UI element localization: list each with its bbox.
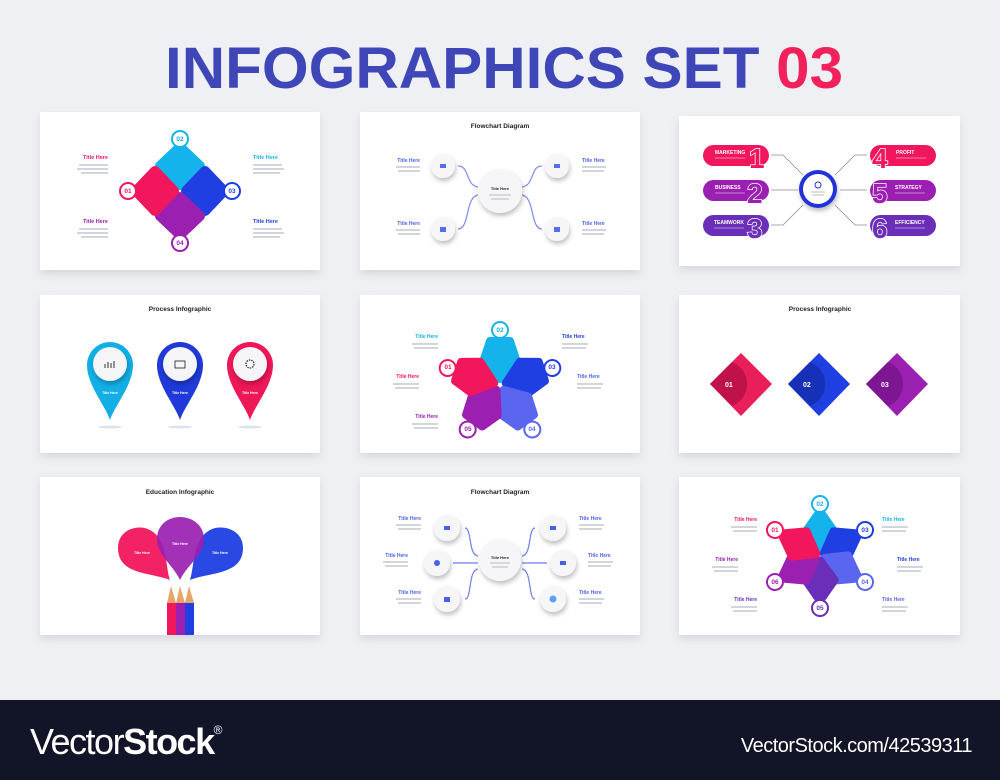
panel: hexagon flower: 06 xyxy=(771,579,779,586)
panel: flowchart 4: Title Here xyxy=(582,221,605,227)
panel: numbered pills: STRATEGY xyxy=(895,185,923,191)
panel: flowchart 6: Title Here xyxy=(579,516,602,522)
panel: flowchart 6: Title Here xyxy=(579,590,602,596)
panel: flowchart 6 xyxy=(360,477,640,635)
pin cyan: Title Here xyxy=(102,391,118,395)
small circles xyxy=(431,154,569,241)
panel: numbered pills xyxy=(679,116,960,266)
diamond 01 xyxy=(710,353,772,416)
panel: pentagon: Title Here xyxy=(562,334,585,340)
central circle xyxy=(479,539,521,581)
diamond 03 xyxy=(866,353,928,416)
panel: flowchart 4 xyxy=(360,112,640,270)
diamond 01: 01 xyxy=(725,382,733,389)
balloon pink xyxy=(118,527,170,580)
panel: pentagon: 02 xyxy=(496,327,504,334)
pin pink xyxy=(227,342,273,420)
petal cyan xyxy=(160,131,200,185)
panel: numbered pills: 5 xyxy=(872,178,888,209)
central circle: Title Here xyxy=(491,186,510,191)
panel: hexagon flower: Title Here xyxy=(734,517,757,523)
numbers: 04 xyxy=(176,240,184,247)
panel: hexagon flower: Title Here xyxy=(715,557,738,563)
panel: hexagon flower: Title Here xyxy=(882,597,905,603)
panel: pentagon xyxy=(360,295,640,453)
right pills xyxy=(870,145,936,236)
panel: hexagon flower: 05 xyxy=(816,605,824,612)
panel: hexagon flower xyxy=(679,477,960,635)
numbers: 02 xyxy=(176,136,184,143)
diamond 03: 03 xyxy=(881,382,889,389)
balloon blue xyxy=(190,527,243,580)
numbers: 01 xyxy=(124,188,132,195)
panel: diamonds: Process Infographic xyxy=(789,306,852,313)
panel: pentagon: Title Here xyxy=(396,374,419,380)
panel: numbered pills: TEAMWORK xyxy=(714,220,744,226)
text blocks: Title Here xyxy=(253,155,278,161)
petal pink xyxy=(120,171,174,211)
panel: numbered pills: 3 xyxy=(747,213,763,244)
panel: education: Education Infographic xyxy=(146,489,215,496)
panel: process pins: Process Infographic xyxy=(149,306,212,313)
panel: pentagon: 01 xyxy=(444,364,452,371)
pin blue xyxy=(157,342,203,420)
panel: hexagon flower: 04 xyxy=(861,579,869,586)
panel: numbered pills: BUSINESS xyxy=(715,185,741,191)
panel: flowchart 6: Title Here xyxy=(385,553,408,559)
pin blue: Title Here xyxy=(172,391,188,395)
petal purple xyxy=(160,197,200,251)
text blocks: Title Here xyxy=(83,219,108,225)
diamond 02 xyxy=(788,353,850,416)
text blocks: Title Here xyxy=(253,219,278,225)
footer bar: VectorStock xyxy=(30,721,214,762)
footer bar xyxy=(0,700,1000,780)
text blocks: Title Here xyxy=(83,155,108,161)
panel: numbered pills: PROFIT xyxy=(896,150,914,156)
panel: numbered pills: 4 xyxy=(872,143,888,174)
panel: numbered pills: MARKETING xyxy=(715,150,745,156)
panel: numbered pills: EFFICIENCY xyxy=(895,220,925,226)
panel: hexagon flower: Title Here xyxy=(882,517,905,523)
pencils xyxy=(167,586,194,635)
panel: flowchart 6: Flowchart Diagram xyxy=(471,489,529,496)
panel: hexagon flower: 01 xyxy=(771,527,779,534)
diamond 02: 02 xyxy=(803,382,811,389)
panel: numbered pills: 6 xyxy=(872,213,888,244)
numbers: 03 xyxy=(228,188,236,195)
central circle xyxy=(478,169,522,213)
panel: education: Title Here xyxy=(172,542,188,546)
footer bar: VectorStock.com/42539311 xyxy=(741,735,972,757)
panel: flowchart 4: Title Here xyxy=(397,158,420,164)
panel: education: Title Here xyxy=(212,551,228,555)
text blocks xyxy=(83,155,278,225)
panel: pentagon: Title Here xyxy=(415,414,438,420)
panel: flowchart 4: Title Here xyxy=(582,158,605,164)
footer bar: ® xyxy=(214,723,223,737)
numbers xyxy=(124,136,236,247)
panel: pentagon: Title Here xyxy=(415,334,438,340)
panel: pentagon: Title Here xyxy=(577,374,600,380)
central circle: Title Here xyxy=(491,555,510,560)
panel: flowchart 6: Title Here xyxy=(398,590,421,596)
panel: pentagon: 03 xyxy=(548,364,556,371)
balloon purple xyxy=(157,517,204,580)
panel: education: Title Here xyxy=(134,551,150,555)
central circle xyxy=(799,170,837,208)
panel: process pins xyxy=(40,295,320,453)
panel: education xyxy=(40,477,320,635)
title: INFOGRAPHICS SET 03 xyxy=(165,36,843,101)
panel: hexagon flower: 02 xyxy=(816,501,824,508)
petal blue xyxy=(186,171,240,211)
panel: pentagon: 05 xyxy=(464,426,472,433)
pin pink: Title Here xyxy=(242,391,258,395)
panel: flowchart 4: Title Here xyxy=(397,221,420,227)
panel: hexagon flower: Title Here xyxy=(897,557,920,563)
pin cyan xyxy=(87,342,133,420)
panel: flowchart 4: Flowchart Diagram xyxy=(471,123,529,130)
panel: numbered pills: 1 xyxy=(749,143,765,174)
panel: hexagon flower: Title Here xyxy=(734,597,757,603)
panel: quad diamond xyxy=(40,112,320,270)
panel: flowchart 6: Title Here xyxy=(588,553,611,559)
panel: hexagon flower: 03 xyxy=(861,527,869,534)
panel: numbered pills: 2 xyxy=(747,178,763,209)
panel: diamonds xyxy=(679,295,960,453)
left pills xyxy=(703,145,769,236)
panel: flowchart 6: Title Here xyxy=(398,516,421,522)
panel: pentagon: 04 xyxy=(528,426,536,433)
